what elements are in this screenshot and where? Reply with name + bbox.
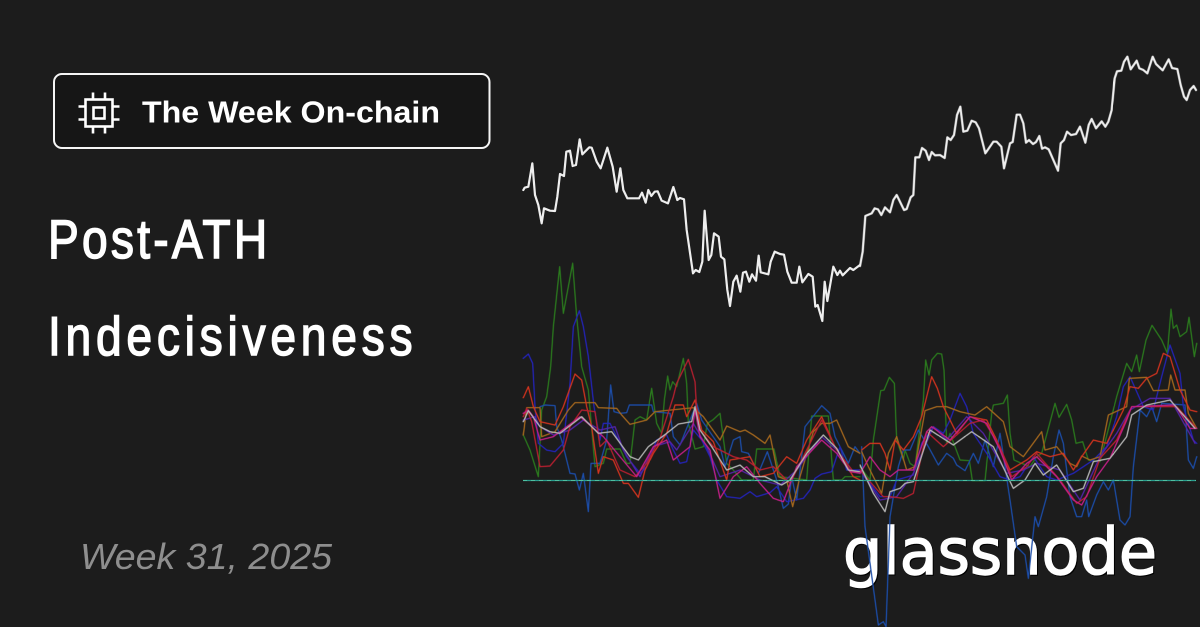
date: Week 31, 2025: Week 31, 2025 [80, 536, 333, 577]
line chart: indicators [523, 263, 1197, 627]
line chart: price [523, 57, 1196, 321]
badge label: The Week On-chain [142, 94, 440, 130]
badge: The Week On-chain [54, 74, 490, 148]
logo: glassnode: glassnode [843, 516, 1157, 590]
title: Post-ATH [48, 208, 267, 270]
title [48, 208, 413, 367]
baseline: zero line [523, 480, 1196, 482]
title: Indecisiveness [48, 305, 413, 367]
icon: microchip [78, 92, 120, 134]
